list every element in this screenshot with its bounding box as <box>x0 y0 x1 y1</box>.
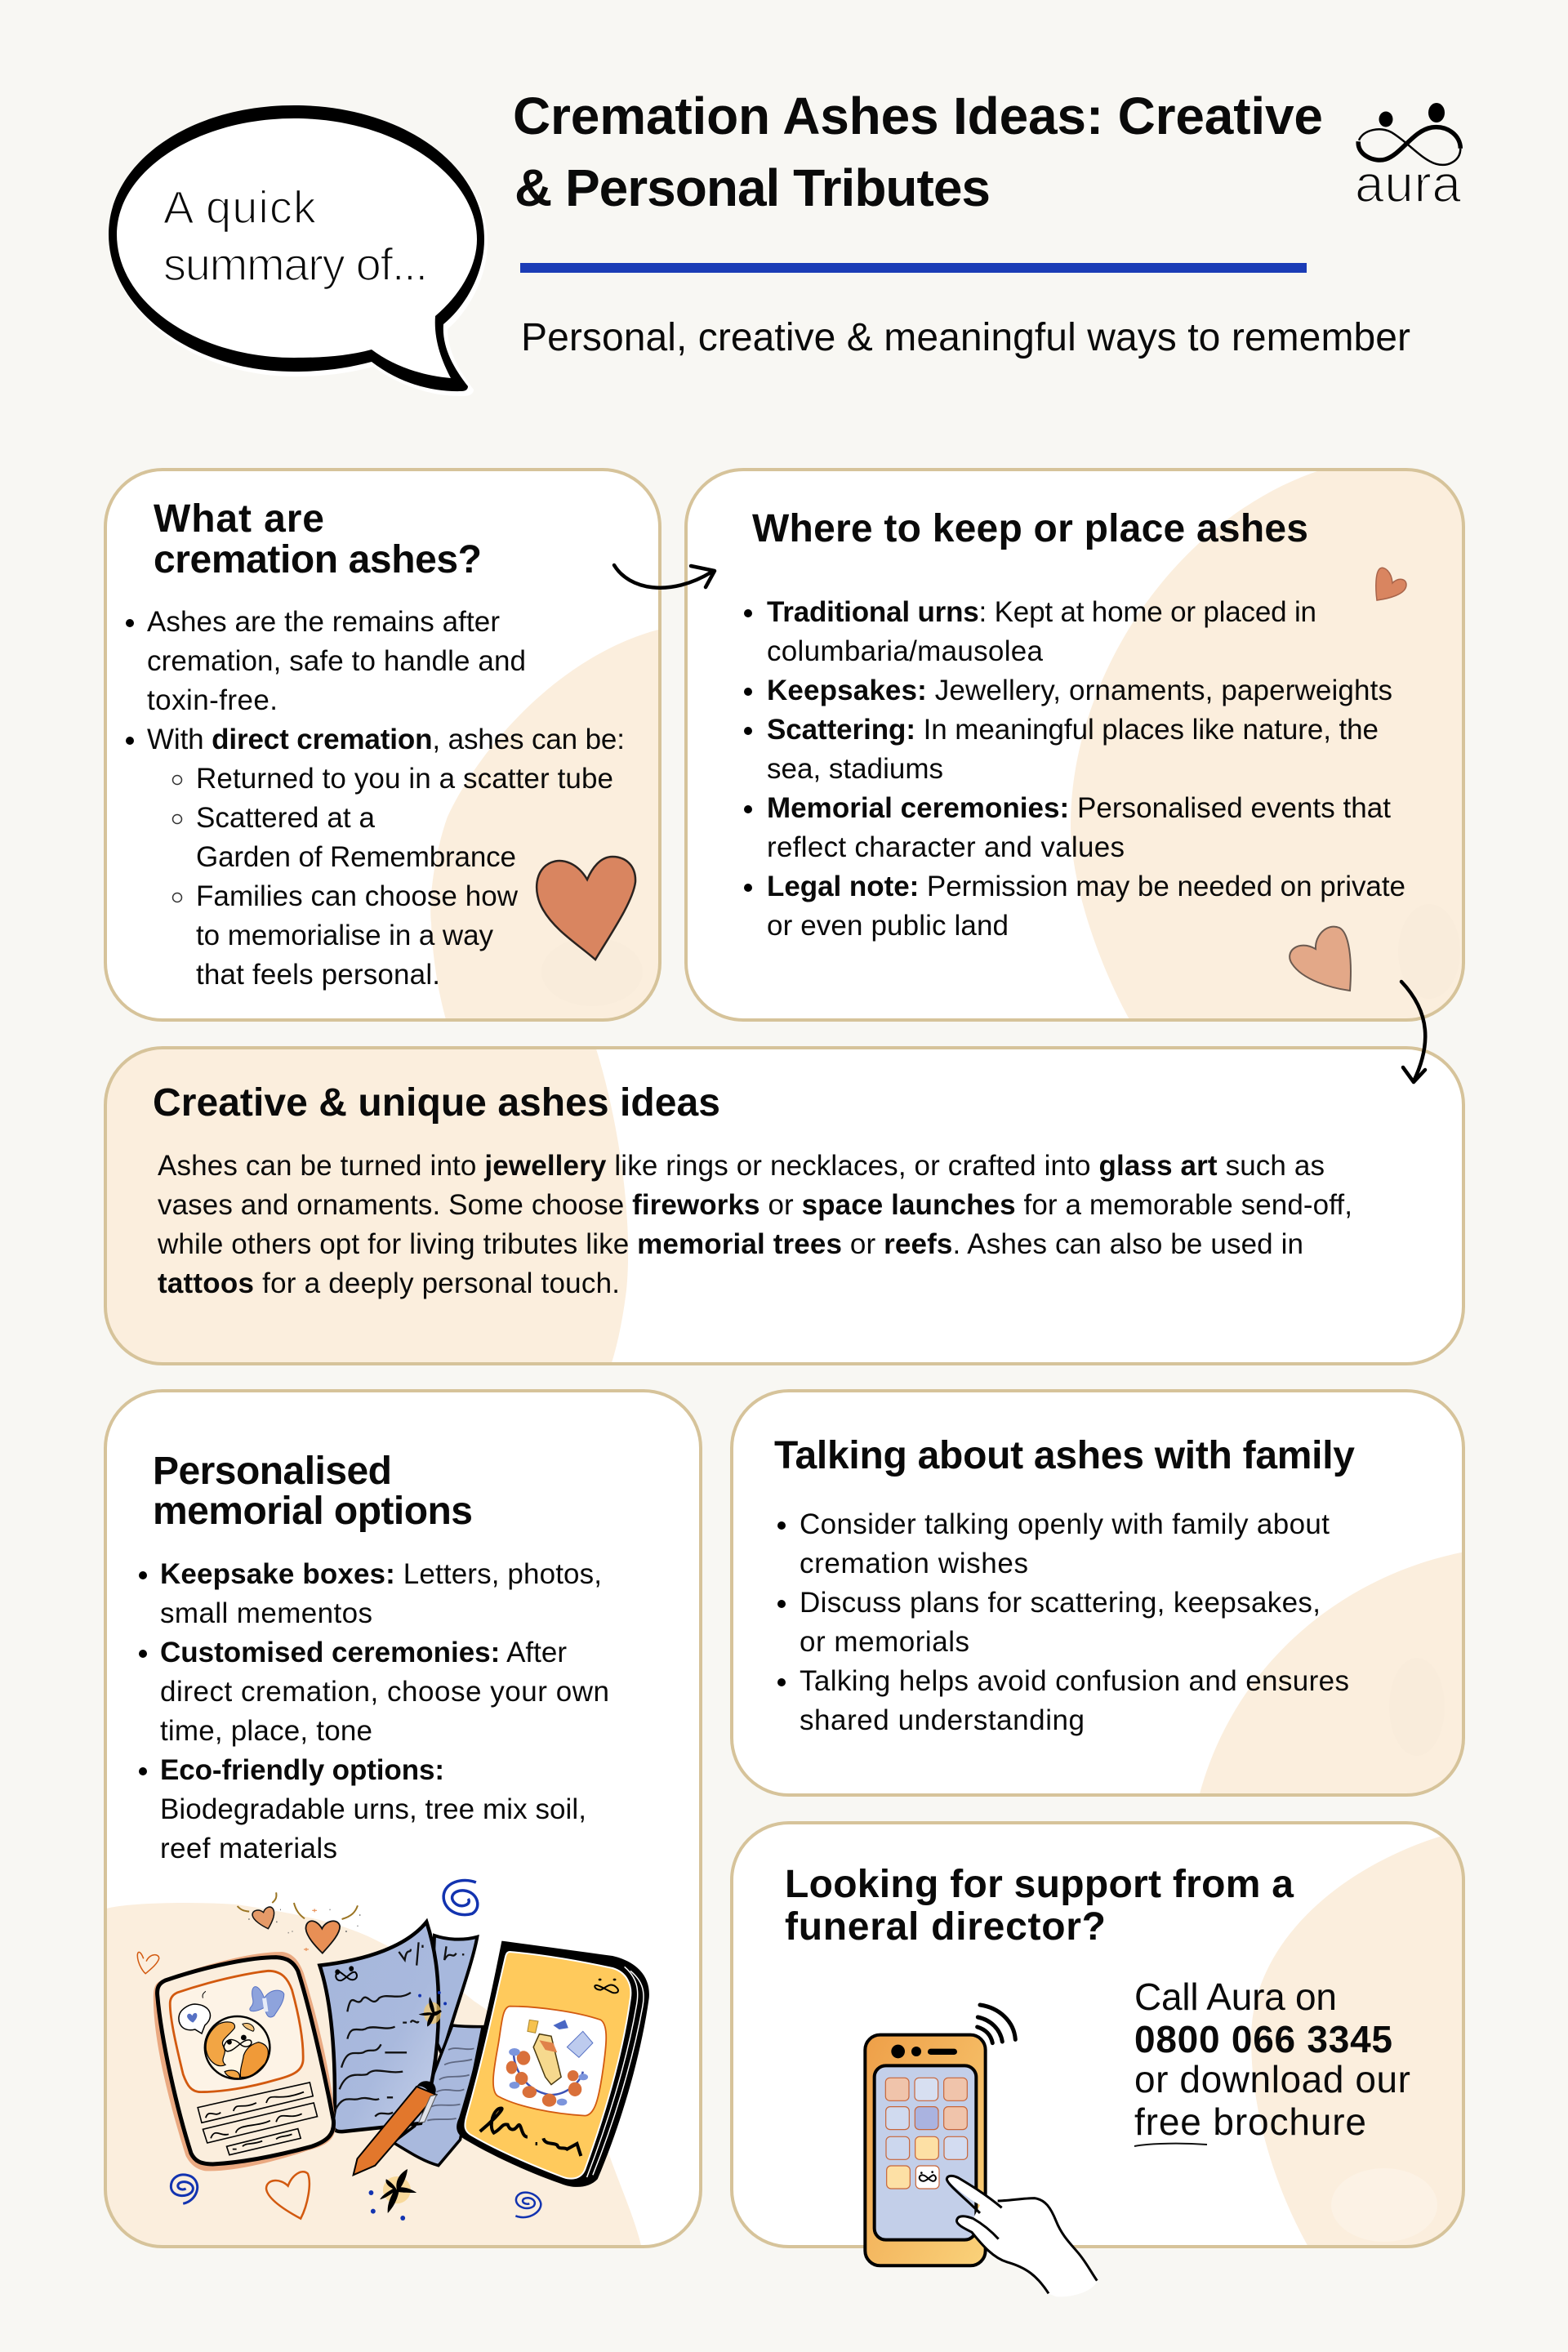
heading: Personalised <box>153 1450 392 1493</box>
panel: where to keep or place ashes <box>686 468 1465 1022</box>
bullet list: Ashes are the remains after <box>147 606 500 638</box>
bullet list: Legal note: Permission may be needed on private <box>767 871 1405 902</box>
heading: funeral director? <box>785 1905 1106 1949</box>
heart outline: bottom <box>266 2172 310 2219</box>
illustration: phone and hand <box>865 2005 1098 2296</box>
panel: talking about ashes with family <box>732 1391 1465 1797</box>
bullet list: sea, stadiums <box>767 753 943 785</box>
bullet list: cremation, safe to handle and <box>147 645 526 677</box>
call to action text: 0800 066 3345 <box>1134 2018 1392 2060</box>
bullet list: Families can choose how <box>196 880 519 912</box>
bullet list: Biodegradable urns, tree mix soil, <box>160 1793 586 1825</box>
small speech bubble <box>179 2004 210 2034</box>
papers <box>319 1922 483 2166</box>
title rule <box>520 263 1307 273</box>
app grid <box>885 2078 968 2189</box>
spiral: right <box>515 2193 541 2217</box>
bullet list: Talking helps avoid confusion and ensures <box>800 1665 1349 1697</box>
title <box>513 87 1323 217</box>
wifi arcs <box>978 2005 1015 2043</box>
bubble text <box>163 181 428 290</box>
icon: pale heart <box>1290 927 1351 991</box>
candle, note and photo <box>528 2020 538 2033</box>
title: & Personal Tributes <box>514 158 991 217</box>
bullet list: Traditional urns: Kept at home or placed in <box>767 596 1316 628</box>
heading: Creative & unique ashes ideas <box>153 1081 720 1125</box>
icon: large heart <box>537 857 635 960</box>
pencil <box>354 2081 436 2175</box>
star burst <box>369 2169 416 2221</box>
keepsake card <box>154 1952 336 2171</box>
globe <box>205 2016 270 2079</box>
heading: Talking about ashes with family <box>774 1434 1355 1477</box>
call to action text: Call Aura on <box>1134 1976 1337 2018</box>
heart outline: left <box>137 1952 159 1974</box>
panel: looking for support from a funeral director <box>732 1823 1465 2296</box>
app logo <box>920 2171 936 2181</box>
heading <box>785 1863 1294 1949</box>
wreath <box>514 2052 583 2095</box>
bullet list: that feels personal. <box>196 959 440 991</box>
bullet list: Consider talking openly with family about <box>800 1508 1330 1540</box>
bullet list: Discuss plans for scattering, keepsakes, <box>800 1587 1321 1619</box>
subtitle: Personal, creative & meaningful ways to remember <box>521 316 1410 359</box>
bullet list <box>777 1508 1349 1736</box>
bullet list: Keepsakes: Jewellery, ornaments, paperweights <box>767 675 1392 706</box>
call to action text: free brochure <box>1134 2100 1366 2143</box>
butterfly <box>250 1987 284 2017</box>
bullet list: Scattering: In meaningful places like nature, the <box>767 714 1379 746</box>
bullet list: columbaria/mausolea <box>767 635 1044 667</box>
heading: What are <box>154 497 324 541</box>
illustration: keepsakes, letters and memorial book <box>137 1880 649 2221</box>
heading: Looking for support from a <box>785 1863 1294 1906</box>
bullet list: With direct cremation, ashes can be: <box>147 724 625 755</box>
heading: memorial options <box>153 1490 473 1533</box>
bullet list: or memorials <box>800 1626 969 1658</box>
bubble text: summary of... <box>163 238 428 290</box>
call to action text <box>1134 1976 1410 2146</box>
spiral: left <box>171 2175 198 2203</box>
star on paper <box>418 1991 447 2027</box>
bullet list <box>139 1558 609 1864</box>
arrow: panel 1 to panel 2 <box>614 565 715 588</box>
heading: cremation ashes? <box>154 538 482 581</box>
body text: Ashes can be turned into jewellery like rings or necklaces, or crafted into glass art such as <box>158 1150 1325 1182</box>
bullet list: cremation wishes <box>800 1548 1028 1579</box>
spiral: top <box>443 1880 478 1915</box>
hearts with wings <box>238 1892 360 1953</box>
phone body <box>865 2035 986 2265</box>
arrow: panel 2 to panel 3 <box>1401 982 1425 1082</box>
bullet list: reflect character and values <box>767 831 1125 863</box>
body text: while others opt for living tributes like memorial trees or reefs. Ashes can also be used in <box>157 1228 1303 1260</box>
name plates <box>198 2082 318 2155</box>
speech bubble: A quick summary of <box>109 105 488 396</box>
body text: tattoos for a deeply personal touch. <box>158 1267 620 1299</box>
heading: Where to keep or place ashes <box>752 507 1308 550</box>
body text: vases and ornaments. Some choose fireworks or space launches for a memorable send-off, <box>158 1189 1352 1221</box>
bullet list: shared understanding <box>800 1704 1085 1736</box>
bubble text: A quick <box>163 181 317 233</box>
icon: small heart <box>1376 568 1406 600</box>
bullet list: toxin-free. <box>147 684 278 716</box>
bullet list: time, place, tone <box>160 1715 372 1747</box>
coffin <box>533 2034 561 2085</box>
small logo <box>595 1985 618 1993</box>
bullet list: Memorial ceremonies: Personalised events that <box>767 792 1391 824</box>
hand <box>947 2176 1098 2296</box>
logo: aura <box>1355 103 1461 213</box>
panel: creative and unique ashes ideas <box>104 1046 1463 1365</box>
bullet list: Scattered at a <box>196 802 376 834</box>
bullet list: reef materials <box>160 1833 337 1864</box>
bullet list <box>126 606 625 991</box>
bullet list: to memorialise in a way <box>196 920 493 951</box>
heading <box>153 1450 473 1533</box>
bullet list: Returned to you in a scatter tube <box>196 763 613 795</box>
underline swoosh <box>1134 2144 1207 2146</box>
bullet list <box>744 596 1405 942</box>
bullet list: Customised ceremonies: After <box>160 1637 567 1668</box>
bullet list: or even public land <box>767 910 1009 942</box>
heading <box>154 497 482 581</box>
body text <box>157 1150 1352 1299</box>
bullet list: Eco-friendly options: <box>160 1754 444 1786</box>
bullet list: Garden of Remembrance <box>196 841 516 873</box>
bullet list: small mementos <box>160 1597 372 1629</box>
bullet list: direct cremation, choose your own <box>160 1676 609 1708</box>
signature <box>480 2109 581 2156</box>
call to action text: or download our <box>1134 2058 1410 2100</box>
title: Cremation Ashes Ideas: Creative <box>513 87 1323 145</box>
panel: what are cremation ashes <box>105 470 662 1022</box>
logo: aura: aura <box>1355 154 1461 213</box>
bullet list: Keepsake boxes: Letters, photos, <box>160 1558 602 1590</box>
panel: personalised memorial options <box>104 1391 701 2248</box>
memorial book <box>457 1941 649 2187</box>
